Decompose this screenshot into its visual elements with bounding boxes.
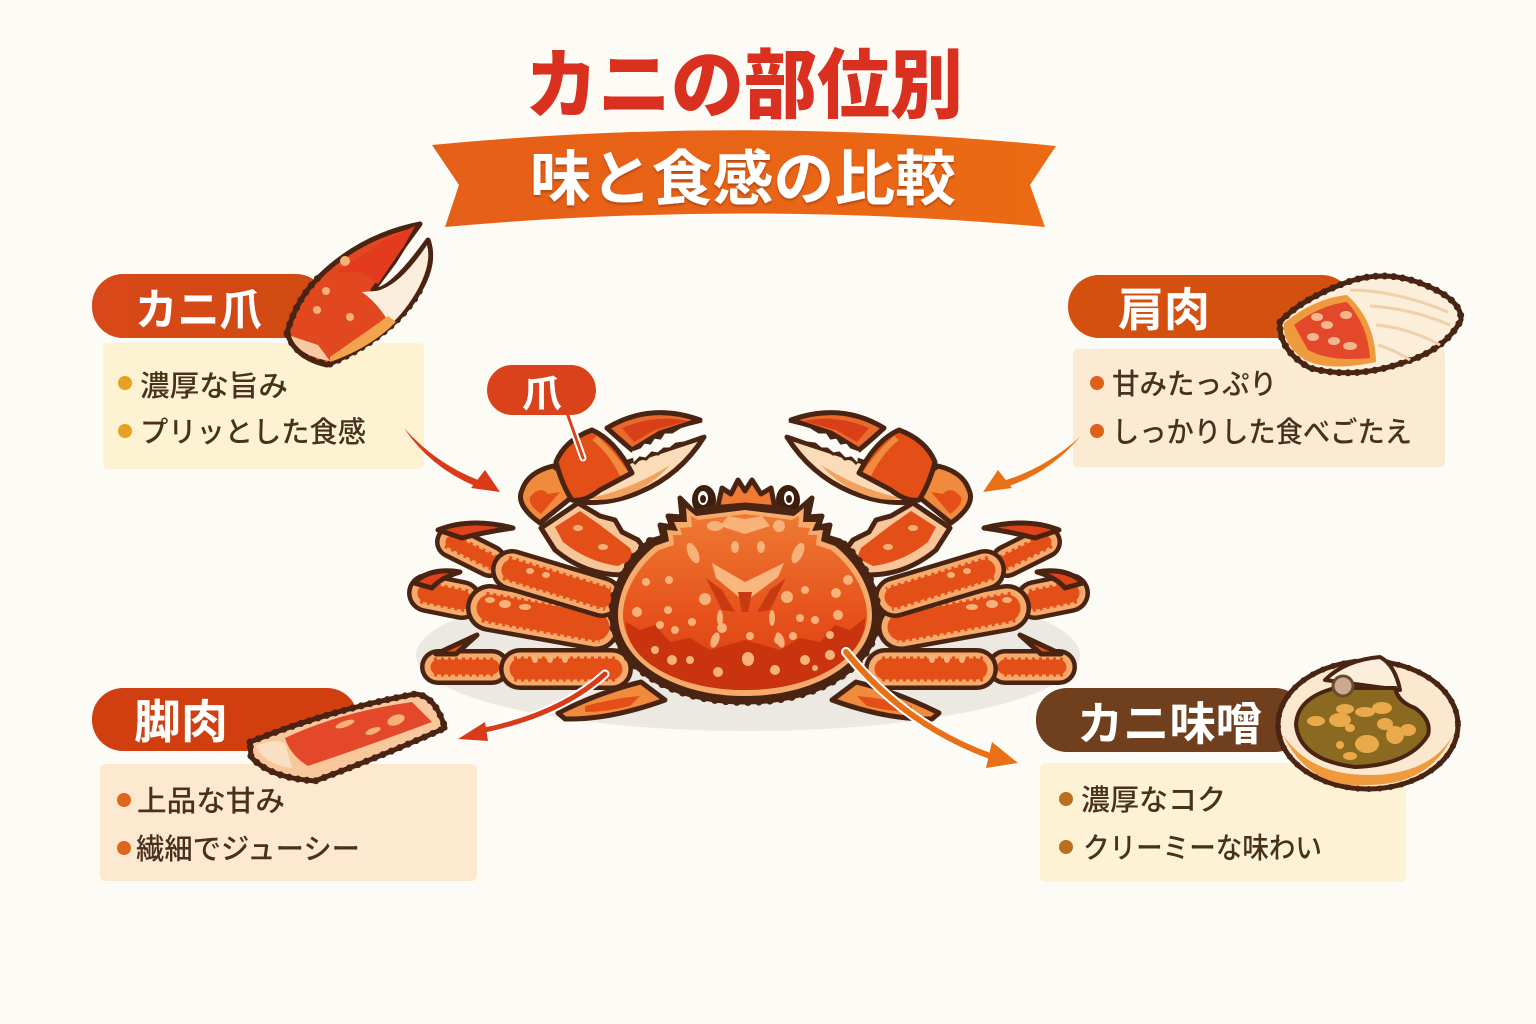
item: 甘みたっぷり — [1112, 368, 1277, 401]
right claw — [787, 413, 971, 575]
item: 繊細でジューシー — [136, 833, 360, 866]
panel: カニ味噌 — [1036, 657, 1458, 882]
item: プリッとした食感 — [140, 416, 366, 449]
bullets — [117, 793, 131, 855]
shell spots — [632, 520, 853, 677]
left claw — [520, 413, 704, 575]
title: カニの部位別 — [525, 44, 963, 129]
heading pill — [92, 688, 358, 751]
heading: 脚肉 — [134, 696, 228, 748]
icon: crab claw — [287, 224, 431, 365]
item: しっかりした食べごたえ — [1112, 416, 1412, 449]
heading: 肩肉 — [1118, 284, 1210, 336]
icon: leg meat — [250, 694, 445, 781]
crab illustration — [414, 413, 1083, 731]
arrow: crab miso — [846, 652, 1018, 768]
bullets — [1090, 376, 1104, 438]
crab shadow — [416, 579, 1080, 731]
shell V mark — [712, 563, 784, 598]
heading: カニ味噌 — [1077, 698, 1262, 750]
list box — [103, 343, 424, 469]
arrow: shoulder panel to crab — [983, 437, 1080, 492]
pointer: 爪 bubble to claw — [566, 410, 583, 458]
icon: shoulder meat — [1280, 276, 1461, 373]
bullets — [118, 376, 132, 438]
crab eyes — [692, 485, 800, 515]
list box — [100, 764, 477, 881]
panel: カニ爪 — [92, 224, 431, 469]
arrow: claw panel to crab — [404, 428, 500, 492]
list box — [1040, 763, 1406, 882]
list box — [1073, 349, 1445, 467]
panel: 肩肉 — [1068, 275, 1461, 467]
arrow: leg meat — [458, 674, 605, 741]
item: 上品な甘み — [137, 785, 285, 818]
icon: miso shell — [1278, 657, 1458, 789]
left legs — [414, 523, 665, 719]
right legs — [832, 523, 1083, 719]
item: クリーミーな味わい — [1083, 832, 1322, 865]
heading pill — [1068, 275, 1353, 338]
item: 濃厚な旨み — [140, 370, 288, 403]
panel: 脚肉 — [92, 688, 477, 881]
heading pill — [1036, 688, 1306, 752]
heading pill — [92, 274, 327, 338]
crab carapace — [612, 498, 878, 702]
crab rostrum — [716, 480, 776, 514]
bullets — [1059, 792, 1073, 854]
heading: カニ爪 — [135, 286, 262, 335]
lower dark shell — [626, 618, 865, 690]
subtitle: 味と食感の比較 — [530, 146, 956, 213]
label bubble: 爪: 爪 — [522, 374, 562, 416]
label bubble: 爪 — [487, 365, 596, 416]
item: 濃厚なコク — [1081, 784, 1226, 817]
banner: subtitle ribbon — [432, 130, 1056, 227]
